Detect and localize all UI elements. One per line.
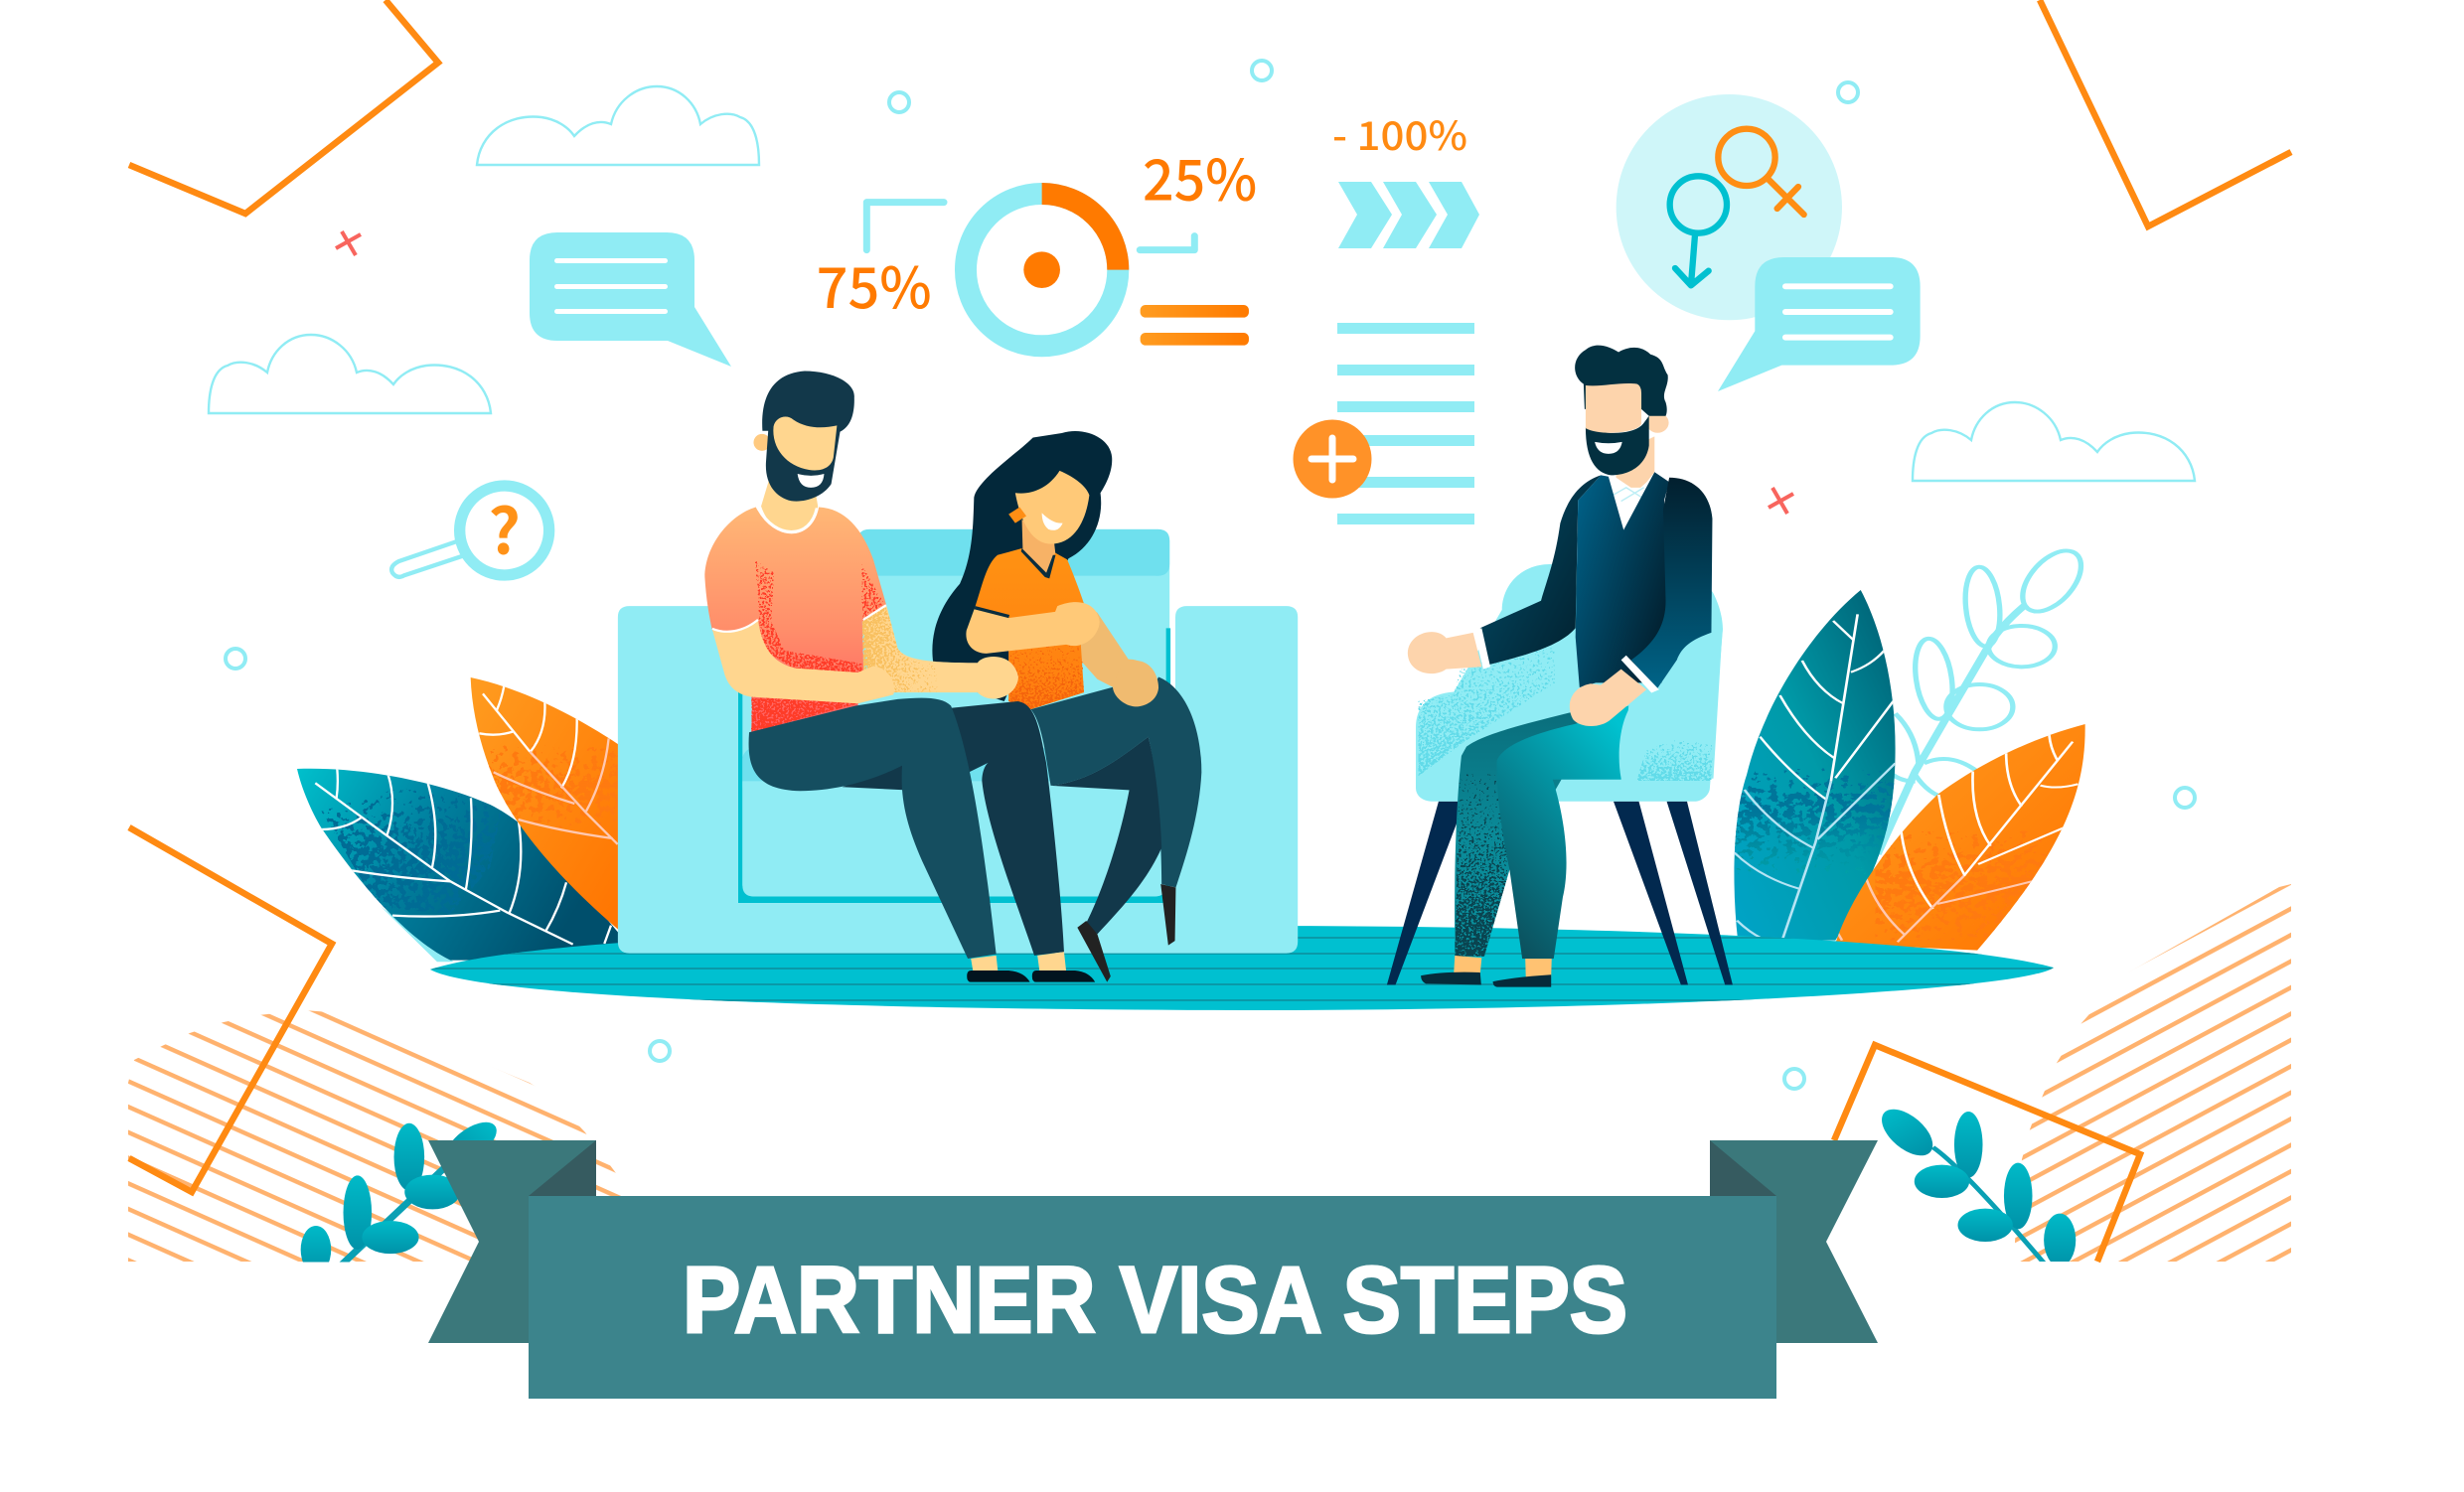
hatching: lower right <box>2015 884 2291 1262</box>
leg lower <box>1051 737 1161 934</box>
hand on knee <box>1113 661 1158 706</box>
armchair <box>1416 564 1723 802</box>
floor rug <box>427 926 2057 1010</box>
armchair legs <box>1387 802 1733 984</box>
hatching: lower left <box>128 1010 677 1262</box>
earring <box>1008 508 1026 523</box>
far arm <box>1077 604 1158 706</box>
back arm <box>862 606 1018 698</box>
shirt collar <box>1609 471 1655 530</box>
near leg <box>1497 705 1628 959</box>
leaf: teal right <box>1734 590 1898 941</box>
t-shirt <box>704 508 886 732</box>
gender symbols <box>1617 94 1842 320</box>
shirt speckle <box>751 559 884 732</box>
small rings <box>226 61 2195 1089</box>
sprig left <box>300 1122 497 1262</box>
face <box>1015 471 1089 544</box>
orange frames <box>129 0 2291 1262</box>
donut chart: 75% <box>817 243 932 325</box>
shoes <box>1077 884 1175 982</box>
arm speckle <box>862 606 938 692</box>
ribbon right tail <box>1710 1140 1878 1343</box>
left cuff <box>1474 628 1490 670</box>
collar <box>1021 548 1055 578</box>
smile <box>798 474 824 488</box>
ribbon body <box>529 1196 1776 1399</box>
magnifier with question mark <box>391 483 549 577</box>
speech bubble right <box>1718 257 1921 391</box>
ear <box>1646 413 1669 433</box>
consultant man <box>1408 346 1723 987</box>
blouse <box>976 548 1084 709</box>
vest <box>1576 472 1669 687</box>
right hand <box>1570 670 1646 726</box>
right sleeve <box>1631 478 1712 689</box>
man with beard on sofa <box>704 371 1095 982</box>
face <box>773 417 837 470</box>
smile <box>1595 442 1622 454</box>
sprig right <box>1882 1109 2077 1262</box>
banner <box>428 1140 1878 1399</box>
donut chart <box>817 136 1257 346</box>
sleeve band <box>974 606 1009 618</box>
fold right <box>1710 1140 1776 1196</box>
ribbon left tail <box>428 1140 596 1343</box>
left hand <box>1408 632 1481 673</box>
ear <box>753 434 770 451</box>
donut chart: 25% <box>1143 136 1257 218</box>
text lines list <box>1337 323 1474 524</box>
near arm <box>966 602 1100 654</box>
sofa <box>618 529 1298 954</box>
neck <box>761 480 818 532</box>
label: -100%: - 100% <box>1332 104 1467 162</box>
neck <box>1617 436 1654 491</box>
armrest <box>1619 628 1723 779</box>
feet <box>971 952 1066 971</box>
hair <box>932 431 1112 701</box>
neck <box>1022 520 1055 577</box>
right cuff <box>1621 656 1659 692</box>
plus badge <box>1294 419 1371 499</box>
shoes <box>1421 972 1551 987</box>
face <box>1586 383 1641 433</box>
outlined branch right <box>1878 543 2093 854</box>
leaf: orange right <box>1835 724 2085 951</box>
beard <box>1586 416 1649 475</box>
smile <box>1042 513 1063 530</box>
left sleeve <box>1480 475 1601 665</box>
socks <box>1454 956 1552 977</box>
legs upper <box>1030 676 1201 888</box>
legs <box>843 701 1064 956</box>
shoes <box>967 970 1095 982</box>
speech bubble left <box>530 232 731 367</box>
front arm <box>712 621 894 703</box>
leaves left <box>297 677 623 962</box>
hair <box>1575 346 1668 416</box>
title: PARTNER VISA STEPS <box>683 1248 1627 1353</box>
hair and beard <box>762 371 854 502</box>
collar <box>757 508 817 532</box>
clouds <box>209 86 2195 481</box>
woman <box>932 431 1201 982</box>
red crosses <box>336 231 1793 514</box>
far leg <box>1455 712 1591 957</box>
magnifier with question mark: ? <box>488 483 521 573</box>
fold left <box>529 1140 596 1196</box>
chevrons <box>1338 182 1479 248</box>
